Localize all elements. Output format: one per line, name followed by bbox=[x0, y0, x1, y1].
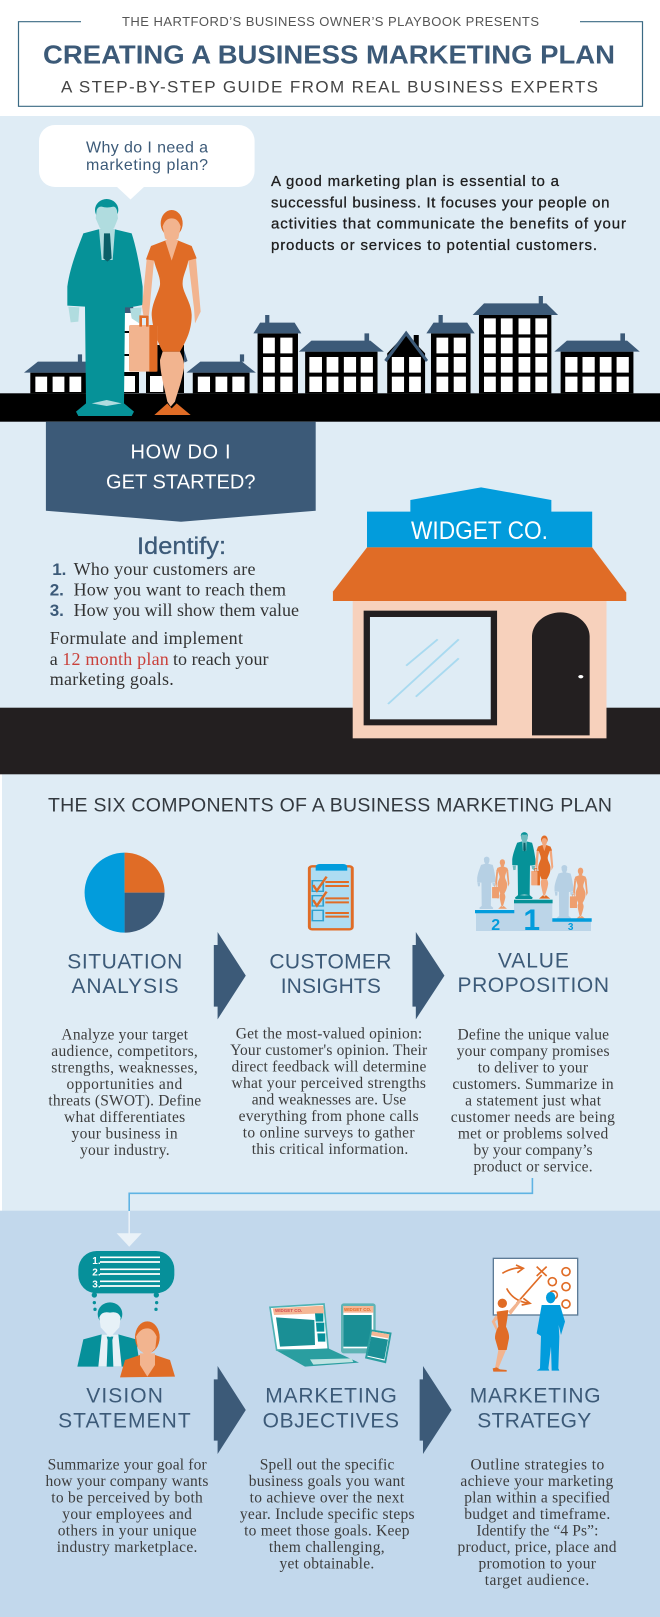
identify list: Who your customers are bbox=[74, 559, 255, 579]
description: Identify the “4 Ps”: bbox=[476, 1522, 598, 1539]
intro paragraph: A good marketing plan is essential to a bbox=[271, 173, 560, 190]
store illustration: WIDGET CO. bbox=[411, 517, 548, 545]
icon: podium with people: 2 bbox=[491, 917, 500, 934]
description: Get the most-valued opinion: bbox=[236, 1026, 422, 1043]
heading: MARKETING bbox=[470, 1385, 601, 1408]
panel: situation analysis bbox=[48, 853, 201, 1159]
description bbox=[458, 1456, 617, 1589]
twelve month plan text: 12 month plan bbox=[62, 649, 169, 669]
description bbox=[451, 1026, 615, 1175]
identify list: 3. bbox=[50, 601, 64, 620]
icon: pie chart bbox=[85, 853, 165, 933]
light blue components background bbox=[2, 774, 660, 1211]
heading: PROPOSITION bbox=[458, 974, 609, 997]
description: business goals you want bbox=[249, 1473, 405, 1490]
twelve month plan text bbox=[50, 628, 269, 689]
description: Your customer's opinion. Their bbox=[230, 1042, 428, 1059]
description: to achieve over the next bbox=[250, 1489, 405, 1506]
heading: STATEMENT bbox=[58, 1410, 191, 1433]
icon: numbered list bubble over two people: 3. bbox=[92, 1280, 101, 1291]
description: product, price, place and bbox=[458, 1539, 617, 1556]
intro paragraph: products or services to potential customers. bbox=[271, 237, 597, 254]
description: opportunities and bbox=[66, 1076, 182, 1093]
description: what your perceived strengths bbox=[232, 1075, 426, 1092]
businessman and businesswoman bbox=[67, 199, 201, 416]
presenter line: THE HARTFORD’S BUSINESS OWNER’S PLAYBOOK PRESENTS bbox=[122, 14, 539, 29]
heading: STRATEGY bbox=[477, 1410, 591, 1433]
description bbox=[48, 1026, 201, 1159]
heading: VALUE bbox=[498, 949, 569, 972]
arrow: customer to value bbox=[412, 932, 444, 1019]
description: to meet those goals. Keep bbox=[244, 1522, 410, 1539]
icon: numbered list bubble over two people: 1. bbox=[92, 1256, 101, 1267]
description: product or service. bbox=[474, 1158, 593, 1175]
description: others in your unique bbox=[58, 1522, 197, 1539]
banner bbox=[46, 422, 316, 522]
identify list: How you will show them value bbox=[74, 600, 299, 620]
identify list bbox=[50, 533, 299, 620]
description: threats (SWOT). Define bbox=[48, 1092, 201, 1109]
heading bbox=[67, 950, 182, 998]
description: customer needs are being bbox=[451, 1109, 615, 1126]
heading: ANALYSIS bbox=[72, 975, 178, 998]
description: direct feedback will determine bbox=[232, 1059, 427, 1076]
intro paragraph bbox=[271, 173, 626, 254]
banner: GET STARTED? bbox=[106, 471, 256, 493]
description: everything from phone calls bbox=[239, 1108, 419, 1125]
store illustration bbox=[333, 487, 626, 738]
twelve month plan text: marketing goals. bbox=[50, 669, 174, 689]
twelve month plan text: to reach your bbox=[173, 649, 268, 669]
description: industry marketplace. bbox=[57, 1539, 197, 1556]
description: strengths, weaknesses, bbox=[51, 1059, 198, 1076]
panel: how do I get started bbox=[0, 422, 660, 774]
arrow: situation to customer bbox=[214, 932, 246, 1019]
icon: podium with people bbox=[475, 832, 592, 937]
title block bbox=[18, 14, 642, 106]
speech bubble: Why do I need a bbox=[86, 140, 208, 157]
identify list: Identify: bbox=[137, 533, 226, 560]
description: met or problems solved bbox=[458, 1125, 608, 1142]
description: to online surveys to gather bbox=[243, 1125, 415, 1142]
description bbox=[230, 1026, 428, 1158]
heading: OBJECTIVES bbox=[263, 1410, 399, 1433]
city skyline bbox=[24, 296, 640, 393]
icon: numbered list bubble over two people bbox=[77, 1251, 175, 1377]
icon: numbered list bubble over two people: 2. bbox=[92, 1268, 101, 1279]
panel: marketing objectives bbox=[240, 1303, 415, 1572]
arrow: connector to second row bbox=[117, 1178, 532, 1247]
description: them challenging, bbox=[269, 1539, 385, 1556]
icon: laptop tablet and phone: WIDGET CO. bbox=[275, 1308, 302, 1313]
description: your employees and bbox=[62, 1506, 192, 1523]
heading: CUSTOMER bbox=[269, 950, 391, 973]
description: your industry. bbox=[80, 1142, 170, 1159]
description bbox=[240, 1456, 415, 1572]
description: this critical information. bbox=[252, 1141, 408, 1158]
panel: vision statement bbox=[46, 1251, 208, 1556]
twelve month plan text: Formulate and implement bbox=[50, 628, 243, 648]
icon: whiteboard with two people bbox=[492, 1258, 578, 1372]
description bbox=[46, 1456, 208, 1556]
icon: clipboard checklist bbox=[309, 864, 352, 929]
heading bbox=[58, 1385, 191, 1433]
description: your business in bbox=[72, 1125, 178, 1142]
heading: MARKETING bbox=[265, 1385, 397, 1408]
light blue upper background bbox=[0, 116, 660, 774]
description: to be perceived by both bbox=[51, 1489, 203, 1506]
street bbox=[0, 393, 660, 422]
description: target audience. bbox=[485, 1572, 589, 1589]
description: what differentiates bbox=[64, 1109, 185, 1126]
heading: INSIGHTS bbox=[281, 975, 381, 998]
description: achieve your marketing bbox=[460, 1473, 613, 1490]
description: a statement just what bbox=[465, 1092, 602, 1109]
description: how your company wants bbox=[46, 1473, 208, 1490]
icon: laptop tablet and phone bbox=[270, 1303, 392, 1367]
description: Define the unique value bbox=[458, 1026, 609, 1043]
arrow: vision to objectives bbox=[214, 1366, 246, 1454]
medium blue lower background bbox=[0, 1211, 660, 1617]
description: and weaknesses are. Use bbox=[252, 1092, 406, 1109]
identify list: 1. bbox=[52, 560, 66, 579]
description: your company promises bbox=[457, 1043, 610, 1060]
heading bbox=[458, 949, 609, 997]
description: to deliver to your bbox=[478, 1059, 589, 1076]
panel: marketing strategy bbox=[458, 1258, 617, 1589]
banner: HOW DO I bbox=[130, 442, 230, 464]
icon: laptop tablet and phone: WIDGET CO. bbox=[344, 1307, 371, 1312]
twelve month plan text: a bbox=[50, 649, 58, 669]
dark road bbox=[0, 708, 660, 774]
description: budget and timeframe. bbox=[464, 1506, 610, 1523]
description: audience, competitors, bbox=[51, 1043, 198, 1060]
description: by your company’s bbox=[474, 1142, 593, 1159]
subtitle: A STEP-BY-STEP GUIDE FROM REAL BUSINESS EXPERTS bbox=[61, 77, 598, 96]
description: year. Include specific steps bbox=[240, 1506, 415, 1523]
heading bbox=[470, 1385, 601, 1433]
intro paragraph: successful business. It focuses your people on bbox=[271, 194, 610, 211]
description: Summarize your goal for bbox=[48, 1456, 208, 1473]
speech bubble bbox=[39, 125, 255, 200]
description: yet obtainable. bbox=[280, 1555, 374, 1572]
panel: customer insights bbox=[230, 864, 428, 1158]
identify list: 2. bbox=[50, 580, 64, 599]
panel: value proposition bbox=[451, 832, 615, 1175]
description: Spell out the specific bbox=[260, 1456, 395, 1473]
heading bbox=[263, 1385, 399, 1433]
heading: SITUATION bbox=[67, 950, 182, 973]
heading bbox=[269, 950, 391, 998]
description: Analyze your target bbox=[61, 1026, 189, 1043]
section heading: THE SIX COMPONENTS OF A BUSINESS MARKETING PLAN bbox=[48, 795, 612, 817]
arrow: objectives to strategy bbox=[420, 1366, 452, 1454]
description: plan within a specified bbox=[464, 1489, 610, 1506]
main title: CREATING A BUSINESS MARKETING PLAN bbox=[43, 39, 615, 69]
identify list: How you want to reach them bbox=[74, 579, 286, 599]
intro panel bbox=[0, 125, 660, 422]
speech bubble: marketing plan? bbox=[86, 157, 208, 174]
heading: VISION bbox=[86, 1385, 163, 1408]
description: promotion to your bbox=[478, 1555, 597, 1572]
icon: podium with people: 3 bbox=[568, 922, 574, 933]
description: Outline strategies to bbox=[470, 1456, 605, 1473]
description: customers. Summarize in bbox=[452, 1076, 614, 1093]
intro paragraph: activities that communicate the benefits of your bbox=[271, 216, 626, 233]
icon: podium with people: 1 bbox=[523, 904, 540, 937]
